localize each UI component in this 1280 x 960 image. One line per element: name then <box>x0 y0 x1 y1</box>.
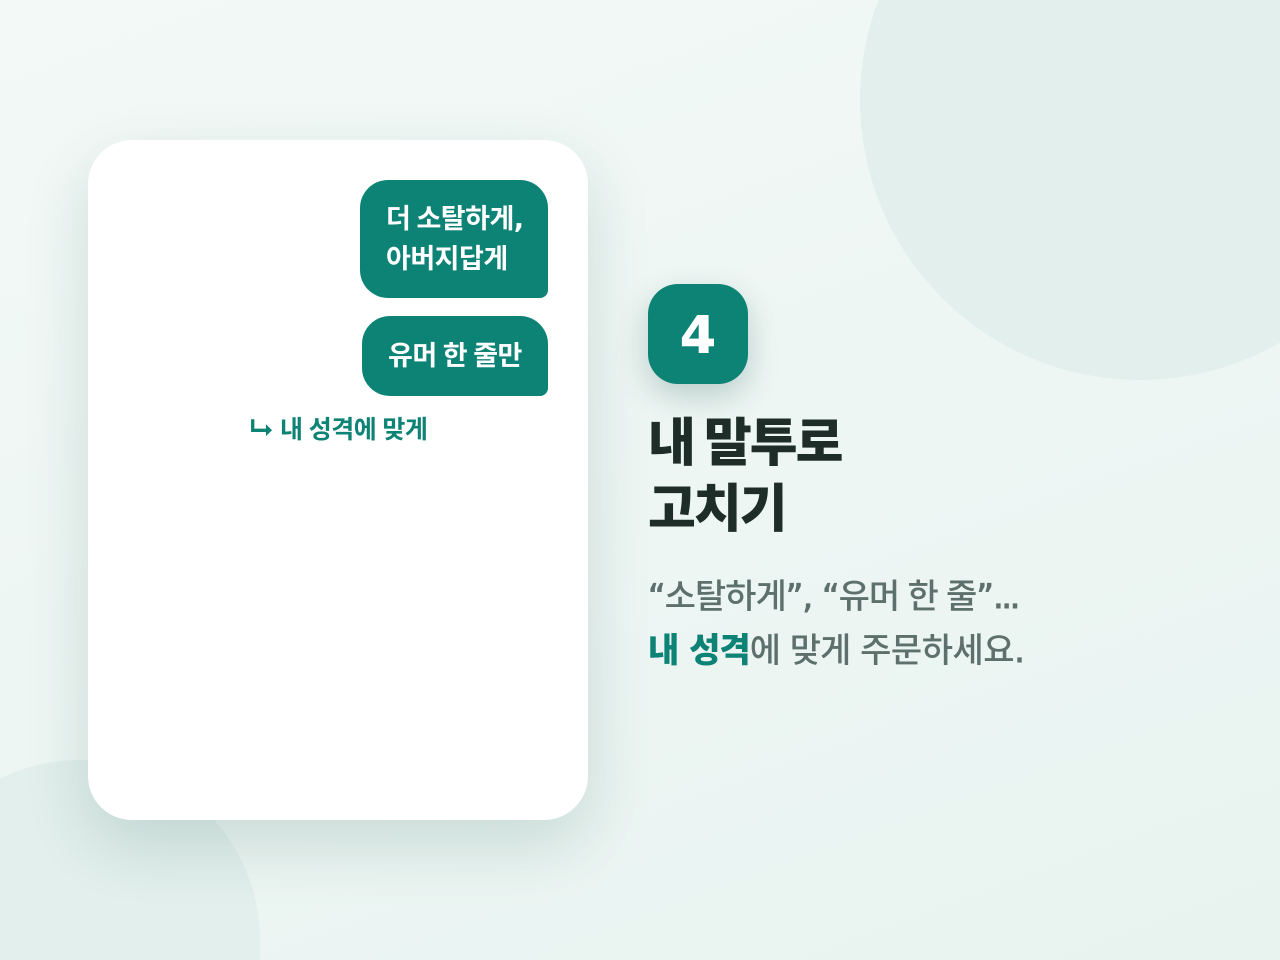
step number badge <box>648 284 748 384</box>
heading: 내 말투로 <box>648 414 841 474</box>
chat bubble: tone request: 더 소탈하게, <box>386 204 524 235</box>
caption: match my personality <box>251 415 427 444</box>
icon: return arrow <box>251 419 272 436</box>
chat bubble: humor request <box>362 316 548 396</box>
chat bubble: humor request: 유머 한 줄만 <box>388 341 522 372</box>
heading: 고치기 <box>648 480 786 540</box>
chat bubble: tone request <box>360 180 548 298</box>
decorative circle: top right <box>860 0 1280 380</box>
caption text: 내 성격에 맞게 <box>280 415 427 444</box>
decorative circle: bottom left <box>0 760 260 960</box>
description text: “소탈하게”, “유머 한 줄”... <box>648 577 1018 617</box>
panel: phone card <box>88 140 588 820</box>
step number badge: 4 <box>680 306 716 366</box>
heading <box>648 414 842 540</box>
description text: 내 성격에 맞게 주문하세요. <box>648 631 1024 671</box>
chat bubble: tone request: 아버지답게 <box>386 244 508 275</box>
description text <box>648 577 1024 671</box>
